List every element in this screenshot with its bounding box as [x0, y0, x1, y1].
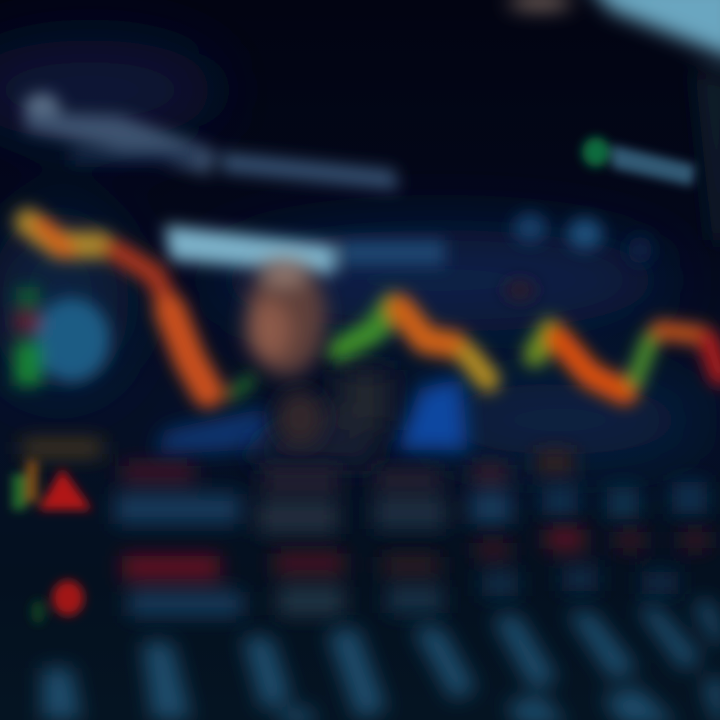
person neck	[276, 390, 324, 446]
person body	[250, 370, 390, 465]
blue chart bars	[155, 378, 468, 455]
blurred heading	[24, 93, 398, 190]
person head	[246, 259, 326, 376]
red dot marker	[31, 580, 84, 624]
line chart right	[340, 305, 720, 392]
top right corner window	[508, 0, 720, 240]
line chart left	[28, 222, 250, 395]
bottom perspective keys	[42, 602, 720, 720]
table row 1	[22, 440, 707, 534]
pie chart left	[14, 287, 110, 386]
screen glow	[0, 40, 700, 455]
blurred sub labels	[165, 213, 652, 300]
person	[246, 259, 390, 465]
red triangle marker	[12, 460, 92, 510]
table row 2	[122, 529, 709, 616]
blurred top right label	[582, 137, 695, 186]
